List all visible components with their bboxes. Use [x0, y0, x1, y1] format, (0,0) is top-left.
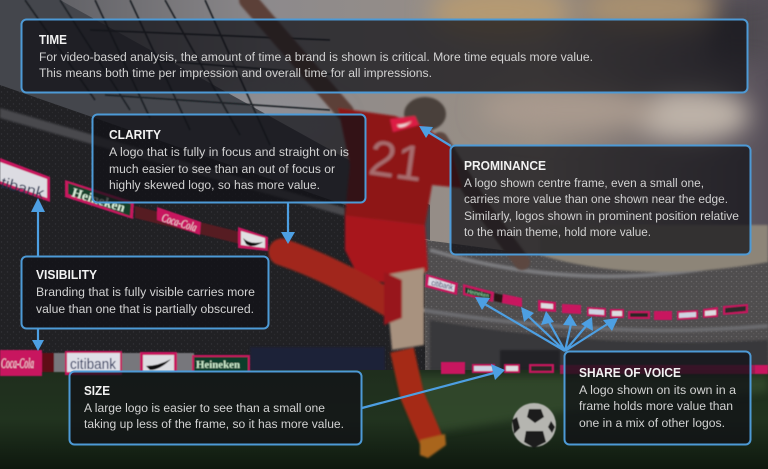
text: prominance description [464, 176, 739, 239]
panel: size [70, 372, 362, 444]
text: time description: For video-based analysis, the amount of time a brand is shown is critical. More time equals more value. [39, 50, 593, 64]
text: share of voice description: one in a mix of other logos. [579, 416, 725, 430]
text: time description: This means both time per impression and overall time for all impressions. [39, 66, 432, 80]
football player [248, 0, 522, 458]
arrow: clarity to nike board [281, 203, 295, 244]
text: visibility description: value than one that is partially obscured. [36, 302, 254, 316]
advertising boards: lower pitchside: citibank [70, 356, 116, 373]
text: clarity description [109, 145, 349, 192]
arrows: share of voice to far-stand boards [475, 297, 618, 351]
advertising boards: left stand: Heineken [70, 185, 128, 215]
text: clarity description: A logo that is fully in focus and straight on is [109, 145, 349, 159]
text: share of voice description: frame holds more value than [579, 399, 733, 413]
advertising boards: left stand [0, 158, 268, 251]
text: size description: taking up less of the frame, so it has more value. [84, 417, 344, 431]
panel: visibility [22, 256, 268, 328]
arrow: visibility to citibank board [31, 198, 45, 256]
arrow: size to small nike board [362, 364, 505, 408]
heading: time: TIME [39, 33, 67, 47]
text: prominance description: Similarly, logos shown in prominent position relative [464, 209, 739, 223]
text: size description: A large logo is easier to see than a small one [84, 401, 325, 415]
heading: visibility: VISIBILITY [36, 268, 98, 282]
text: visibility description [36, 285, 255, 316]
panel: prominance [450, 146, 750, 254]
panel: share of voice [564, 352, 750, 444]
text: share of voice description: A logo shown on its own in a [579, 383, 736, 397]
heading: size: SIZE [84, 384, 110, 398]
text: prominance description: carries more value than one shown near the edge. [464, 192, 728, 206]
panel: clarity [92, 114, 366, 202]
text: prominance description: A logo shown centre frame, even a small one, [464, 176, 704, 190]
advertising boards: lower pitchside [0, 350, 250, 376]
text: share of voice description [579, 383, 736, 430]
football [512, 403, 556, 448]
heading: share of voice: SHARE OF VOICE [579, 366, 681, 380]
arrow: visibility to coca-cola board [32, 329, 44, 351]
advertising boards: far stand: Heineken [467, 289, 489, 300]
heading: prominance: PROMINANCE [464, 159, 546, 173]
advertising boards: far stand: citibank [431, 278, 455, 292]
football player: 21 [365, 129, 427, 192]
text: prominance description: to the main theme, hold more value. [464, 225, 651, 239]
text: time description [39, 50, 593, 80]
advertising boards: left stand: Coca-Cola [160, 210, 199, 234]
advertising boards: left stand: tibank [0, 174, 46, 202]
text: size description [84, 401, 344, 431]
advertising boards: lower pitchside: Heineken [196, 359, 240, 371]
heading: clarity: CLARITY [109, 128, 162, 142]
arrow: prominence to shirt logo [419, 126, 451, 146]
panel: time [22, 20, 748, 92]
advertising boards: far stand [425, 274, 768, 374]
advertising boards: lower pitchside: Coca-Cola [1, 356, 34, 372]
text: clarity description: highly skewed logo, so has more value. [109, 178, 320, 192]
text: visibility description: Branding that is fully visible carries more [36, 285, 255, 299]
text: clarity description: much easier to see than an out of focus or [109, 162, 335, 176]
